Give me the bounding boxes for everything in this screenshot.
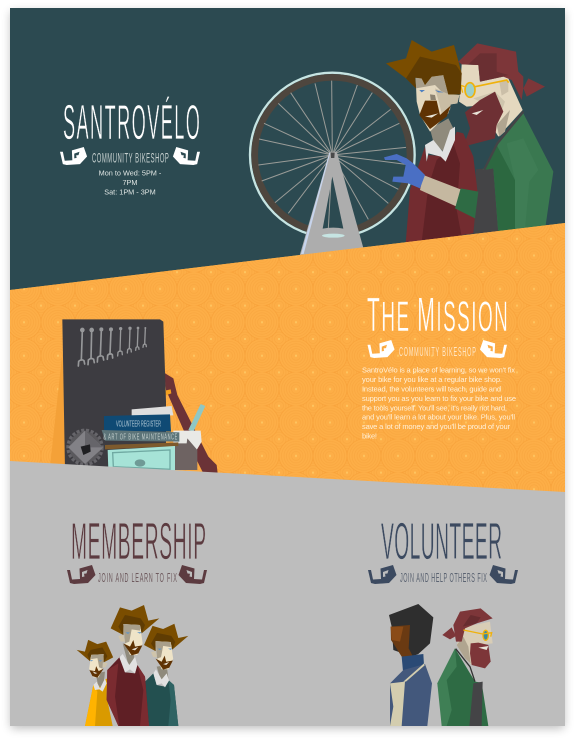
title: Santrovélo: SANTROVÉLO bbox=[63, 95, 200, 150]
book: volunteer register: VOLUNTEER REGISTER bbox=[116, 420, 161, 429]
wrenches bbox=[78, 327, 146, 366]
subtitle: mission: COMMUNITY BIKESHOP bbox=[399, 346, 476, 360]
mission paragraph: Instead, the volunteers will teach, guide and bbox=[362, 384, 501, 394]
opening hours bbox=[99, 168, 162, 196]
gear bbox=[68, 431, 103, 464]
tool board bbox=[62, 319, 166, 470]
mission paragraph: save a lot of money and you'll be proud of your bbox=[362, 422, 510, 431]
illustration: two volunteers bbox=[389, 604, 493, 726]
orange ring pattern bbox=[10, 223, 565, 500]
paper bbox=[132, 406, 173, 416]
volunteer woman bbox=[389, 604, 433, 726]
ornament: hero left bbox=[60, 147, 87, 165]
book: art of bike maintenance: & ART OF BIKE MAINTENANCE bbox=[103, 433, 177, 442]
mission paragraph: the tools yourself. You'll see, it's really not hard, bbox=[362, 403, 507, 412]
illustration: tool board and books bbox=[50, 319, 218, 473]
panel: mission background bbox=[10, 223, 565, 500]
member in teal bbox=[144, 624, 188, 726]
mission paragraph: SantroVélo is a place of learning, so we won't fix bbox=[362, 366, 515, 374]
mission paragraph: and you'll learn a lot about your bike. Plus, you'll bbox=[362, 413, 515, 422]
illustration: three members bbox=[77, 605, 188, 726]
ornament: volunteer left bbox=[368, 565, 396, 584]
ornament: membership left bbox=[67, 565, 96, 584]
mission paragraph: your bike for you like at a regular bike shop. bbox=[362, 375, 502, 384]
board shadow bbox=[50, 353, 67, 467]
book: art of bike maintenance bbox=[102, 430, 179, 449]
mission paragraph bbox=[362, 366, 516, 440]
subtitle: volunteer: JOIN AND HELP OTHERS FIX bbox=[400, 572, 487, 586]
subtitle: Community Bikeshop: COMMUNITY BIKESHOP bbox=[92, 151, 169, 166]
member in red bbox=[107, 605, 159, 726]
title: The Mission: THE MISSION bbox=[367, 287, 508, 341]
ornament: membership right bbox=[178, 565, 207, 584]
mechanic with red sweater bbox=[384, 40, 478, 243]
opening hours: 7PM bbox=[122, 178, 138, 187]
ornament: hero right bbox=[173, 147, 200, 165]
title: Membership: MEMBERSHIP bbox=[71, 514, 206, 571]
ornament: mission right bbox=[480, 340, 507, 358]
member in yellow bbox=[77, 640, 113, 726]
ornament: volunteer right bbox=[490, 565, 518, 584]
book: volunteer register bbox=[104, 414, 171, 432]
mission paragraph: bike! bbox=[362, 431, 377, 440]
mission paragraph: support you as you learn to fix your bike and use bbox=[362, 394, 516, 403]
bike frame piece bbox=[164, 373, 218, 473]
illustration: wheel and two mechanics bbox=[250, 40, 553, 260]
wheel bbox=[250, 73, 415, 237]
subtitle: membership: JOIN AND LEARN TO FIX bbox=[98, 572, 177, 586]
opening hours: Sat: 1PM - 3PM bbox=[104, 188, 156, 196]
panel: hero background bbox=[10, 8, 565, 298]
panel: membership and volunteer background bbox=[10, 461, 565, 726]
mechanic with glasses bbox=[458, 43, 553, 237]
volunteer man with glasses bbox=[437, 608, 493, 726]
wheel stand bbox=[298, 152, 367, 260]
opening hours: Mon to Wed: 5PM - bbox=[99, 168, 162, 178]
ornament: mission left bbox=[368, 340, 395, 358]
mug with straw bbox=[173, 404, 205, 470]
drawer bbox=[108, 446, 175, 473]
title: Volunteer: VOLUNTEER bbox=[381, 514, 502, 571]
